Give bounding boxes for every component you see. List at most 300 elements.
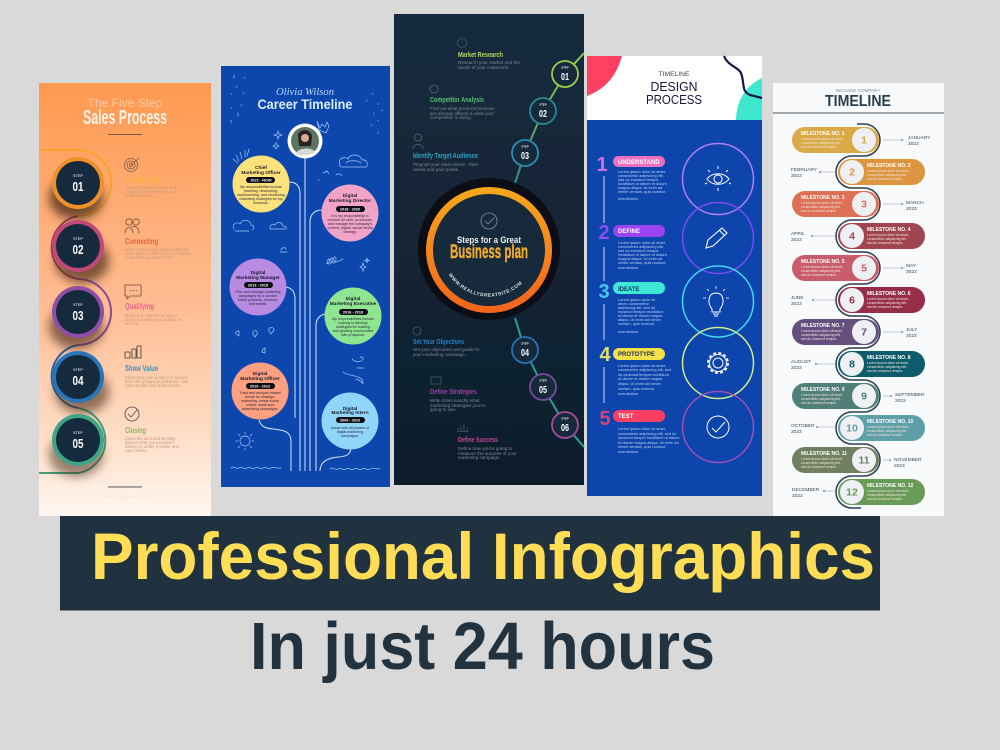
milestone 11: sed do eiusmod tempor. [801, 465, 837, 469]
step badge 02: 02 [539, 109, 547, 120]
step 02: 02 [72, 242, 84, 257]
milestone 12 [792, 479, 925, 505]
step: test: eiusmod tempor incididunt ut labore [618, 435, 680, 440]
serpentine line [836, 124, 880, 508]
milestone 9: 9 [861, 391, 867, 403]
card: chief marketing officer: Marketing Officer [241, 170, 281, 176]
card: chief marketing officer: business. [253, 201, 269, 205]
card: digital marketing officer: advertising campaigns. [242, 407, 278, 411]
step: ideate: adipiscing elit, sed do [618, 305, 655, 310]
milestone 7: 2023 [906, 333, 917, 339]
milestone 3 [792, 191, 924, 217]
milestone 3: Lorem ipsum dolor sit amet, [801, 201, 843, 205]
card: digital marketing executive: helping to develop [338, 321, 368, 325]
milestone 1: Lorem ipsum dolor sit amet, [801, 137, 843, 141]
step 04 [52, 351, 109, 414]
step: define: minim veniam, quis nostrud [618, 260, 665, 265]
step badge 06: STEP [561, 416, 569, 420]
milestone 12: 2023 [792, 493, 803, 499]
step: ideate: amet, consectetur [618, 301, 650, 306]
step: understand: sed do eiusmod tempor [618, 177, 659, 182]
milestone 12: MILESTONE NO. 12 [867, 483, 914, 489]
milestone 8 [791, 351, 925, 377]
milestone 7 [792, 319, 918, 345]
step badge 02 [530, 98, 556, 124]
subheading: in just 24 hours: In just 24 hours [250, 609, 715, 684]
step 05: 05 [72, 436, 84, 451]
text: define strategies: Write down exactly what [430, 398, 480, 403]
icon: clock badge [481, 213, 497, 229]
card: digital marketing executive: strategies for building [336, 325, 370, 329]
heading: sales process: The Five Step [88, 96, 163, 110]
card: digital marketing officer: Marketing Officer [240, 376, 280, 382]
text: competitor analysis: competition is doing. [430, 115, 472, 120]
step: prototype: do eiusmod tempor incididunt [618, 372, 670, 377]
text: market research: Market Research [458, 50, 503, 59]
step: define: Lorem ipsum dolor sit amet, [618, 240, 666, 245]
panel: sales process [39, 83, 211, 516]
text: define strategies: marketing strategies you're [430, 403, 485, 408]
card: digital marketing executive: Marketing Executive [330, 301, 377, 307]
milestone 8: AUGUST [791, 359, 811, 365]
step: understand: Lorem ipsum dolor sit amet, [618, 169, 666, 174]
card: digital marketing intern: digital marketing [337, 430, 363, 434]
milestone 5: sed do eiusmod tempor. [801, 273, 837, 277]
milestone 9: SEPTEMBER [895, 392, 925, 398]
milestone 4: 4 [849, 231, 855, 243]
heading: career timeline [258, 86, 353, 112]
milestone 7: MILESTONE NO. 7 [801, 323, 845, 329]
milestone 4: Lorem ipsum dolor sit amet, [867, 233, 909, 237]
milestone 9: 2023 [895, 398, 906, 404]
central title: Business plan [450, 242, 528, 263]
milestone 3: consectetur adipiscing elit, [801, 205, 841, 209]
milestone 10: consectetur adipiscing elit, [867, 429, 907, 433]
milestone 3: sed do eiusmod tempor. [801, 209, 837, 213]
card: chief marketing officer: My responsibilities include [240, 185, 282, 189]
heading: timeline: INCOADE COMPANY [836, 88, 880, 93]
step: test: consectetur adipiscing elit, sed do [618, 431, 676, 436]
text: competitor analysis: are already offered & what your [430, 111, 494, 116]
text: define success: Define how you're going to [458, 446, 513, 451]
text: qualifying: group is inside your product or [125, 317, 182, 322]
milestone 1: JANUARY [908, 135, 931, 141]
step numbers and lines: 2 [598, 222, 610, 244]
milestone 9: sed do eiusmod tempor. [801, 401, 837, 405]
step badge 05: STEP [539, 378, 547, 382]
footer rule [103, 486, 147, 499]
milestone 8: Lorem ipsum dolor sit amet, [867, 361, 909, 365]
text: connecting: to meet its prospect's first. [125, 255, 174, 260]
step badge 04: 04 [521, 348, 529, 359]
text: show value: fixes the prospects problems. Use [125, 379, 189, 384]
text: identify target audience: needs and pain points. [413, 167, 459, 172]
milestone 9: Lorem ipsum dolor sit amet, [801, 393, 843, 397]
step badge 04: STEP [521, 342, 529, 346]
text: prospecting: inquire for interested in your [125, 189, 178, 194]
milestone 6: Lorem ipsum dolor sit amet, [867, 297, 909, 301]
text: market research [458, 38, 520, 70]
heading: timeline [773, 88, 944, 114]
heading: career timeline: Career Timeline [258, 97, 353, 112]
milestone 8: consectetur adipiscing elit, [867, 365, 907, 369]
milestone 1: MILESTONE NO. 1 [801, 131, 845, 137]
milestone 6: consectetur adipiscing elit, [867, 301, 907, 305]
step 02 [52, 220, 109, 283]
text: closing: deliver what you promised. [125, 440, 175, 445]
milestone 11: NOVEMBER [894, 457, 922, 463]
step: ideate: exercitation. [618, 329, 639, 334]
milestone 2: 2023 [791, 173, 802, 179]
milestone 2: FEBRUARY [791, 167, 818, 173]
text: show value: Show how your product or service [125, 375, 189, 380]
step: test: minim veniam, quis nostrud [618, 444, 665, 449]
step: define: sed do eiusmod tempor [618, 248, 659, 253]
step: define: exercitation. [618, 265, 639, 270]
text: market research: Research your market and the [458, 60, 520, 65]
milestone 1: sed do eiusmod tempor. [801, 145, 837, 149]
step: ideate: ut labore et dolore magna [618, 313, 663, 318]
step: understand: consectetur adipiscing elit, [618, 173, 664, 178]
central circle [418, 178, 560, 320]
step: understand: exercitation. [618, 196, 639, 201]
milestone 9 [792, 383, 925, 409]
milestone 5: MAY [906, 263, 917, 269]
heading: timeline: TIMELINE [825, 93, 891, 110]
milestone 10: 10 [846, 423, 858, 435]
card: digital marketing intern: Digital [343, 406, 357, 412]
step: understand: UNDERSTAND [618, 160, 660, 166]
step numbers and lines: 1 [596, 154, 608, 176]
step badge 03: 03 [521, 151, 529, 162]
milestone 10: OCTOBER [791, 423, 815, 429]
milestone 2: sed do eiusmod tempor. [867, 177, 903, 181]
milestone 6: 6 [849, 295, 855, 307]
panel: career timeline [221, 66, 390, 487]
milestone 4: APRIL [791, 231, 805, 237]
text: show value: Show Value [125, 364, 158, 373]
step 05 [49, 414, 104, 477]
step: understand: magna aliqua. Ut enim ad [618, 185, 662, 190]
milestone 8: 2023 [791, 365, 802, 371]
milestone 3: 2023 [906, 206, 917, 212]
card: digital marketing executive: Digital [346, 296, 360, 302]
milestone 8: sed do eiusmod tempor. [867, 369, 903, 373]
milestone 12: 12 [846, 487, 858, 499]
step badge 05: 05 [539, 385, 547, 396]
step badge 03 [512, 140, 538, 166]
step 03: 03 [72, 308, 84, 323]
text: identify target audience [413, 134, 479, 172]
milestone 5: 2023 [906, 269, 917, 275]
card: digital marketing executive [324, 288, 382, 344]
text: prospecting: Prospecting [125, 175, 159, 184]
text: set your objectives: Set your objectives and goals for [413, 347, 480, 352]
text: closing: over deliver. [125, 448, 148, 453]
heading: design process: DESIGN [650, 79, 698, 94]
text: qualifying: service. [125, 321, 139, 326]
panel: timeline milestones [773, 83, 944, 516]
card: digital marketing intern: Marketing Intern [331, 410, 369, 416]
icon: check badge [125, 407, 139, 421]
milestone 2: 2 [849, 167, 855, 179]
card: digital marketing manager [230, 258, 286, 316]
text: define strategies [430, 377, 485, 412]
step badge 01: 01 [561, 72, 569, 83]
step 01: 01 [72, 179, 84, 194]
text: prospecting: product/service. [125, 193, 155, 198]
step: define: consectetur adipiscing elit, [618, 244, 664, 249]
text: define success: Define Success [458, 435, 498, 444]
card: digital marketing director: 2018 - 2020 [340, 207, 360, 211]
text: competitor analysis [430, 85, 495, 120]
milestone 7: consectetur adipiscing elit, [801, 333, 841, 337]
step: prototype [613, 348, 671, 396]
milestone 5: MILESTONE NO. 5 [801, 259, 845, 265]
text: competitor analysis: Find out what products/services [430, 106, 495, 111]
card: chief marketing officer [232, 156, 290, 212]
banner: professional infographics: Professional Infographics [91, 519, 875, 593]
step 01 [49, 157, 104, 220]
central title: WWW.REALLYGREATSITE.COM [449, 272, 522, 297]
milestone 4: consectetur adipiscing elit, [867, 237, 907, 241]
card: digital marketing officer: trends for strategic [245, 395, 275, 399]
step: define: incididunt ut labore et dolore [618, 252, 667, 257]
card: digital marketing manager: brand products, services, [238, 298, 278, 302]
milestone 2: consectetur adipiscing elit, [867, 173, 907, 177]
step: ideate: IDEATE [618, 287, 640, 293]
milestone 10: sed do eiusmod tempor. [867, 433, 903, 437]
milestone 4: sed do eiusmod tempor. [867, 241, 903, 245]
card: digital marketing officer [232, 362, 288, 420]
card: digital marketing manager: Marketing Manager [236, 275, 280, 281]
milestone 4: MILESTONE NO. 4 [867, 227, 911, 233]
milestone 7: sed do eiusmod tempor. [801, 337, 837, 341]
step badge 01: STEP [561, 66, 569, 70]
text: closing: Closing [125, 426, 146, 435]
step: test: exercitation. [618, 449, 639, 454]
ring: eye [682, 144, 754, 214]
milestone 6: JUNE [791, 295, 804, 301]
step badge 05 [530, 374, 556, 400]
milestone 2: MILESTONE NO. 2 [867, 163, 911, 169]
milestone 5: consectetur adipiscing elit, [801, 269, 841, 273]
step: understand: minim veniam, quis nostrud [618, 189, 665, 194]
milestone 4: 2023 [791, 237, 802, 243]
step numbers and lines: 5 [599, 408, 611, 430]
card: digital marketing executive: My responsibilities include [332, 317, 374, 321]
ring: pencil [682, 202, 754, 274]
milestone 10 [791, 415, 925, 441]
card: digital marketing executive: with prospects. [341, 333, 365, 337]
milestone 3: 3 [861, 199, 867, 211]
step 02: STEP [73, 237, 83, 241]
text: connecting: interested in. Offer to find a solution [125, 251, 192, 256]
heading: design process [646, 72, 702, 107]
step: define: magna aliqua. Ut enim ad [618, 256, 662, 261]
card: digital marketing intern: campaigns. [341, 434, 359, 438]
timeline lines [259, 158, 351, 471]
milestone 7: JULY [906, 327, 918, 333]
step: understand: incididunt ut labore et dolore [618, 181, 667, 186]
milestone 7: Lorem ipsum dolor sit amet, [801, 329, 843, 333]
milestone 10: 2023 [791, 429, 802, 435]
text: define strategies: going to use. [430, 407, 456, 412]
milestone 11: 11 [858, 455, 870, 467]
card: digital marketing officer: 2010 - 2012 [250, 384, 270, 388]
card: digital marketing manager: campaigns for a number [239, 294, 278, 298]
step: prototype: Lorem ipsum dolor sit amet, [618, 363, 666, 368]
card: chief marketing officer: marketing strategies for my [239, 197, 283, 201]
text: define strategies: Define Strategies [430, 387, 477, 396]
text: qualifying: Make sure that the prospect [125, 313, 178, 318]
card: digital marketing director: content, digital, social media [327, 226, 373, 230]
milestone 2 [791, 159, 925, 185]
milestone 11: Lorem ipsum dolor sit amet, [801, 457, 843, 461]
text: qualifying: Qualifying [125, 302, 154, 311]
milestone 12: Lorem ipsum dolor sit amet, [867, 489, 909, 493]
step: ideate: Lorem ipsum dolor sit [618, 297, 656, 302]
milestone 5: Lorem ipsum dolor sit amet, [801, 265, 843, 269]
icon: people [125, 219, 139, 233]
step badge 06: 06 [561, 423, 569, 434]
step: ideate: veniam, quis nostrud [618, 321, 654, 326]
step 04: 04 [72, 373, 84, 388]
card: digital marketing director: oversee all work, processes, [327, 218, 373, 222]
doodles: sky [231, 75, 382, 470]
step: prototype: ut labore et dolore magna [618, 376, 663, 381]
milestone 7: 7 [861, 327, 867, 339]
ring: gear [682, 328, 754, 398]
step: prototype: consectetur adipiscing elit, sed [618, 367, 671, 372]
milestone 5: 5 [861, 263, 867, 275]
step: test: Lorem ipsum dolor sit amet, [618, 426, 666, 431]
milestone 3: MILESTONE NO. 3 [801, 195, 845, 201]
icon: bar chart [125, 346, 141, 358]
milestone 12: sed do eiusmod tempor. [867, 497, 903, 501]
connector line [515, 53, 584, 447]
text: qualifying [125, 302, 182, 326]
step: prototype: aliqua. Ut enim ad minim [618, 381, 661, 386]
step: ideate [613, 282, 665, 334]
footer rule: www.reallygreatsite.com [103, 494, 147, 499]
step badge 03: STEP [521, 144, 529, 148]
milestone 6: 2023 [791, 301, 802, 307]
card: digital marketing director: Marketing Director [329, 198, 371, 204]
decorative corner shapes [587, 56, 762, 120]
text: prospecting [125, 175, 178, 198]
step badge 04 [512, 337, 538, 363]
milestone 11: consectetur adipiscing elit, [801, 461, 841, 465]
heading: career timeline: Olivia Wilson [276, 86, 334, 98]
milestone 1: consectetur adipiscing elit, [801, 141, 841, 145]
text: show value [125, 364, 189, 388]
step 03 [49, 286, 104, 349]
icon: speech bubble [125, 285, 141, 299]
card: digital marketing executive: 2016 - 2018 [343, 310, 363, 314]
step: ideate: eiusmod tempor incididunt [618, 309, 664, 314]
card: digital marketing intern: Assist with all phases of [331, 426, 369, 430]
step 01: STEP [73, 174, 83, 178]
heading: design process: TIMELINE [658, 72, 690, 78]
step 03: STEP [73, 303, 83, 307]
ring: light bulb [682, 266, 754, 337]
step badge 02: STEP [539, 102, 547, 106]
step: define [613, 225, 667, 270]
card: digital marketing officer: media, email and [246, 403, 274, 407]
step: prototype: exercitation. [618, 391, 639, 396]
panel: design process [587, 56, 762, 496]
text: prospecting: Discuss potential leads and [125, 185, 177, 190]
text: show value: case studies and testimonials. [125, 383, 181, 388]
card: digital marketing director [322, 184, 378, 242]
card: digital marketing director: Digital [343, 193, 357, 199]
central title [449, 235, 528, 297]
milestone 11 [792, 447, 922, 473]
milestone 10: MILESTONE NO. 10 [867, 419, 914, 425]
milestone 9: MILESTONE NO. 9 [801, 387, 845, 393]
milestone 9: consectetur adipiscing elit, [801, 397, 841, 401]
text: define success: measure the success of your [458, 451, 517, 456]
step: prototype: PROTOTYPE [618, 352, 655, 358]
card: digital marketing officer: Track and analyze market [239, 391, 281, 395]
milestone 8: 8 [849, 359, 855, 371]
step: ideate: aliqua. Ut enim ad minim [618, 317, 661, 322]
step numbers and lines: 3 [598, 281, 610, 303]
central title: Steps for a Great [457, 235, 522, 246]
heading: design process: PROCESS [646, 92, 702, 107]
card: digital marketing intern: 2009 - 2010 [340, 418, 360, 422]
step numbers and lines [596, 154, 611, 430]
card: digital marketing executive: and growing communities [333, 329, 374, 333]
text: set your objectives: your marketing campaign. [413, 352, 466, 357]
icon: target [124, 158, 139, 172]
winding path [39, 150, 111, 473]
step: understand [613, 156, 667, 201]
card: digital marketing director: strategy. [343, 230, 357, 234]
heading: sales process: Sales Process [83, 107, 167, 129]
text: identify target audience: Pinpoint your ideal clients - their [413, 162, 479, 167]
card: chief marketing officer: 2021 - NOW [250, 178, 272, 182]
card: digital marketing manager: Plan and manage marketing [236, 290, 280, 294]
milestone 1: 1 [861, 135, 867, 147]
text: closing: Deliver to under promise and [125, 444, 179, 449]
card: digital marketing director: and manage the company's [328, 222, 372, 226]
ring: check [682, 392, 754, 462]
profile photo [288, 124, 322, 158]
text: set your objectives: Set Your Objectives [413, 337, 464, 346]
step badge 06 [552, 412, 578, 438]
milestone 11: 2023 [894, 463, 905, 469]
text: define success [457, 424, 517, 460]
milestone 6 [791, 287, 925, 313]
card: digital marketing intern [322, 392, 378, 450]
card: digital marketing officer: Digital [253, 371, 267, 377]
milestone 1 [792, 127, 931, 153]
milestone 10: Lorem ipsum dolor sit amet, [867, 425, 909, 429]
text: set your objectives [413, 327, 480, 357]
card: digital marketing manager: Digital [251, 270, 265, 276]
text: closing [125, 426, 179, 453]
card: digital marketing officer: marketing, create social [241, 399, 279, 403]
text: connecting: Connecting [125, 237, 158, 246]
card: digital marketing manager: 2013 - 2015 [248, 283, 268, 287]
heading: sales process [83, 96, 167, 135]
step 04: STEP [73, 368, 83, 372]
milestone 6: sed do eiusmod tempor. [867, 305, 903, 309]
card: chief marketing officer: planning, developing, [244, 189, 278, 193]
milestone 12: DECEMBER [792, 487, 820, 493]
